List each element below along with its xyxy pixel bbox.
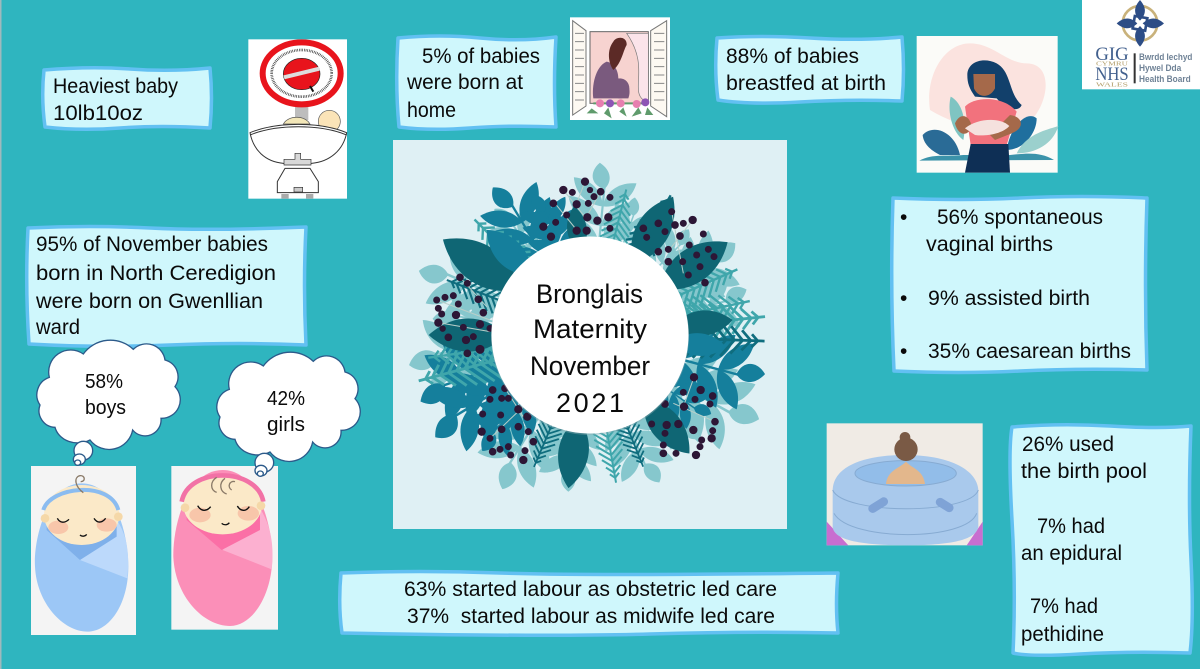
logo: Hywel Dda Health Board: Bwrdd Iechyd [1139, 52, 1193, 62]
icon: breastfeeding mother [917, 36, 1058, 173]
text box: pain relief: 26% used [1022, 433, 1114, 456]
text box: born at home: home [407, 99, 456, 122]
text box: North Ceredigion: were born on Gwenllian [35, 290, 263, 313]
text box: birth types: 35% caesarean births [928, 340, 1131, 363]
logo: Hywel Dda Health Board: Hywel Dda [1139, 63, 1182, 73]
text box: birth types [892, 196, 1147, 372]
title text: Bronglais [536, 279, 643, 309]
thought bubble: 58% boys: 58% [85, 371, 123, 393]
title text: November [530, 351, 650, 381]
thought bubble: 58% boys [37, 340, 180, 465]
icon: pregnant woman at window [570, 17, 670, 120]
text box: North Ceredigion [27, 226, 306, 346]
text box: breastfed at birth: breastfed at birth [726, 72, 886, 95]
text box: North Ceredigion: ward [35, 316, 80, 339]
icon: baby boy [31, 466, 136, 635]
text box: heaviest baby: Heaviest baby [53, 75, 178, 98]
illustration: boys and girls [31, 340, 360, 635]
thought bubble: 42% girls: girls [267, 414, 305, 436]
text box: labour care: 37% started labour as midwife led care [407, 605, 775, 628]
text box: breastfed at birth: 88% of babies [726, 45, 859, 68]
text box: pain relief: the birth pool [1021, 460, 1147, 483]
text box: born at home: were born at [406, 71, 523, 94]
text box: pain relief: pethidine [1021, 623, 1104, 646]
logo: Hywel Dda Health Board: Health Board [1139, 74, 1191, 84]
text box: labour care [340, 572, 838, 635]
text box: birth types: 56% spontaneous [937, 206, 1103, 229]
thought bubble: 42% girls: 42% [267, 388, 305, 410]
text box: heaviest baby: 10lb10oz [53, 102, 143, 125]
logo: Hywel Dda Health Board: WALES [1096, 82, 1128, 88]
text box: pain relief: an epidural [1021, 542, 1122, 565]
text box: birth types: vaginal births [926, 233, 1053, 256]
icon: baby weighing scales [248, 39, 347, 199]
logo: Hywel Dda Health Board [1082, 0, 1200, 89]
text box: pain relief [1010, 425, 1192, 655]
logo: Hywel Dda Health Board: NHS [1095, 64, 1129, 85]
logo knot emblem [1117, 0, 1164, 47]
title text: Maternity [533, 314, 647, 344]
thought bubble: 42% girls [217, 352, 360, 476]
icon: baby girl [171, 466, 278, 630]
text box: pain relief: 7% had [1030, 595, 1098, 618]
text box: breastfed at birth [716, 36, 904, 103]
text box: North Ceredigion: 95% of November babies [36, 233, 268, 256]
text box: born at home [397, 36, 556, 129]
wreath illustration [403, 160, 775, 505]
text box: heaviest baby [43, 68, 211, 129]
text box: pain relief: 7% had [1037, 515, 1105, 538]
logo: Hywel Dda Health Board: GIG [1095, 44, 1129, 65]
panel: central wreath title [393, 140, 787, 529]
thought bubble: 58% boys: boys [85, 397, 126, 419]
title text [530, 279, 650, 418]
text box: North Ceredigion: born in North Ceredigion [36, 262, 276, 285]
text box: birth types: • [900, 287, 907, 310]
text box: birth types: • [900, 206, 907, 229]
title text: 2021 [556, 388, 624, 418]
text box: born at home: 5% of babies [422, 45, 540, 68]
icon: birth pool [827, 423, 983, 545]
text box: birth types: • [900, 340, 907, 363]
logo: Hywel Dda Health Board: CYMRU [1096, 62, 1129, 68]
text box: birth types: 9% assisted birth [928, 287, 1090, 310]
text box: labour care: 63% started labour as obstetric led care [404, 578, 777, 601]
